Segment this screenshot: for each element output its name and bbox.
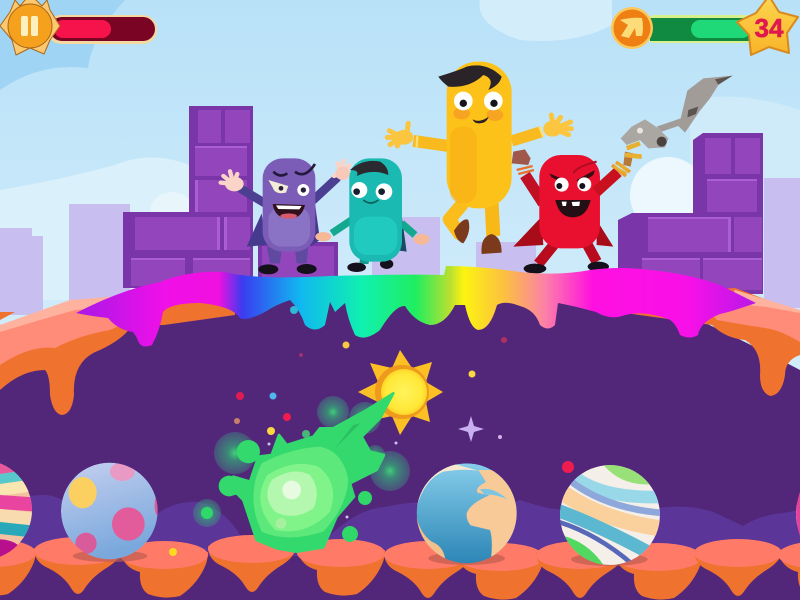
character: red (512, 149, 613, 274)
sparkle star (458, 416, 484, 442)
purple brick tower right (618, 133, 763, 294)
energy bar (648, 15, 752, 43)
dark purple cavern (0, 289, 800, 600)
platforms (0, 535, 800, 600)
glowing green orbs (193, 396, 410, 527)
axe with bat wing (614, 76, 733, 173)
character: yellow (387, 62, 571, 254)
score number: 34 (755, 13, 784, 43)
confetti particles (169, 306, 574, 556)
red arm with bracelet (596, 162, 630, 192)
clouds (0, 0, 800, 300)
distant lavender buildings (0, 178, 800, 315)
ball: earth globe (413, 460, 520, 565)
energy badge (611, 7, 653, 49)
purple brick tower left (123, 106, 253, 288)
ball: right edge (796, 464, 800, 564)
ball: striped pastel (560, 465, 660, 566)
character: teal (315, 158, 430, 272)
ball: blue polka dot (61, 462, 160, 562)
sun (358, 350, 443, 435)
character: purple (221, 158, 350, 274)
ball: striped left (0, 463, 32, 556)
pause health bar (47, 15, 157, 44)
pause button (0, 0, 60, 55)
arch left (0, 290, 235, 415)
solid green droplets (201, 430, 372, 542)
rainbow slime bridge (76, 266, 756, 346)
small brick block (258, 242, 338, 282)
score star (737, 0, 798, 55)
back hills (0, 495, 800, 556)
arch right (618, 288, 800, 396)
green fireball (219, 393, 393, 552)
